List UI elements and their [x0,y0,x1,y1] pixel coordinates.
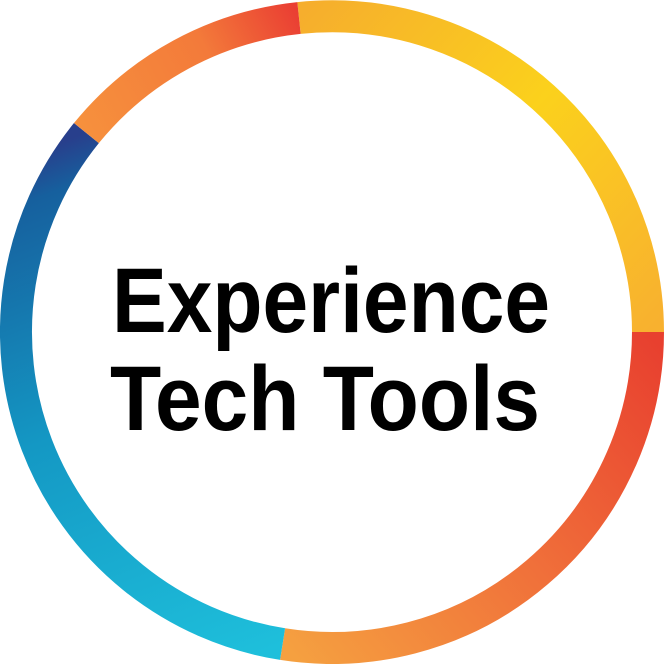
ring segment: yellow [299,16,648,332]
title: Experience [112,250,550,352]
ring segment: red-orange [283,332,648,648]
title [110,250,550,450]
ring segment: cyan-blue [16,133,283,644]
ring segment: orange [86,18,299,133]
title: Tech Tools [110,348,540,450]
